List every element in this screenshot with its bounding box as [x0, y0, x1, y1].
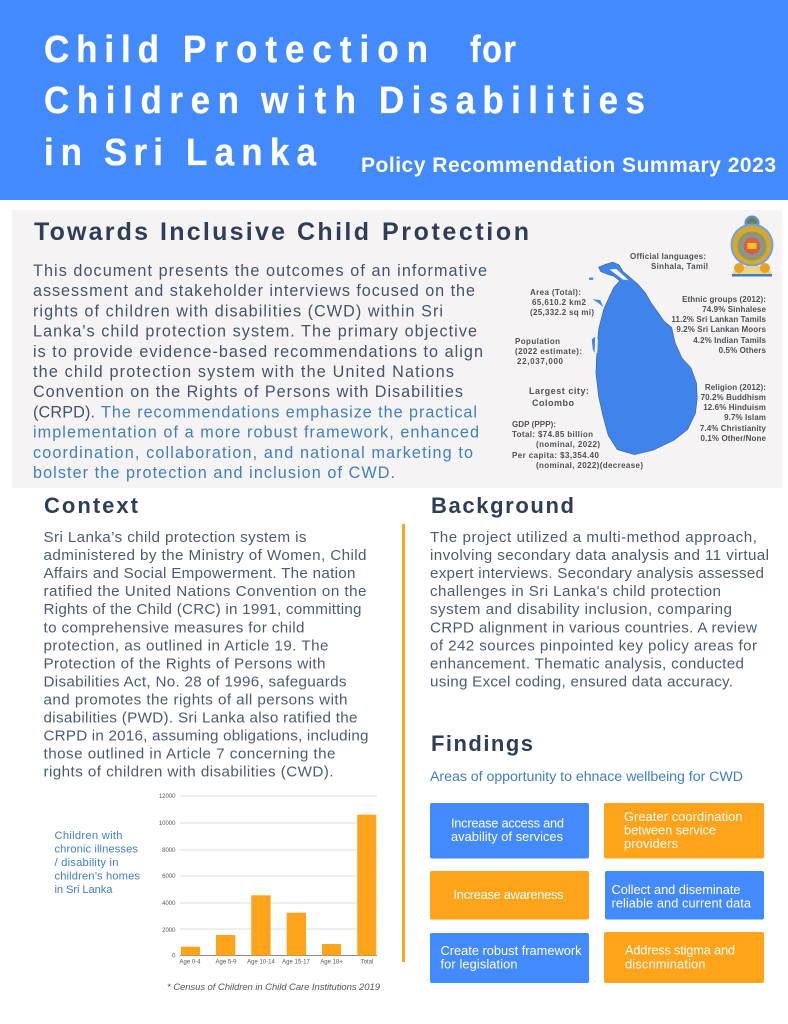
context text: Rights of the Child (CRC) in 1991, committing [44, 601, 362, 618]
GDP: GDP (PPP): [512, 420, 556, 429]
box: access to services [430, 803, 589, 858]
religion [700, 383, 766, 443]
background text: of 242 sources pinpointed key policy areas for [430, 637, 757, 654]
bar chart: Age 15-17 [282, 960, 310, 966]
GDP: (nominal, 2022)(decrease) [536, 461, 643, 470]
box: access to services: Increase access and [451, 816, 564, 830]
background text [430, 529, 769, 690]
GDP: (nominal, 2022) [536, 440, 600, 449]
background text: challenges in Sri Lanka's child protection [430, 583, 721, 600]
box: collect data: Collect and diseminate [612, 882, 740, 897]
icon: national emblem [730, 216, 774, 276]
bar chart [159, 794, 377, 966]
bar chart: 8000 [162, 848, 176, 854]
official languages: Official languages: [630, 252, 706, 261]
box: robust framework: Create robust framework [440, 943, 582, 958]
ethnic groups: 74.9% Sinhalese [702, 305, 766, 314]
panel: context [44, 493, 368, 781]
ethnic groups [671, 295, 766, 355]
box: stigma [604, 932, 764, 983]
divider [402, 524, 405, 962]
title: with [260, 79, 356, 121]
intro text: The recommendations emphasize the practical [101, 403, 477, 421]
ethnic groups: 11.2% Sri Lankan Tamils [671, 315, 766, 324]
box: robust framework: for legislation [440, 956, 518, 972]
title: Child [44, 28, 159, 70]
intro text: implementation of a more robust framework, enhanced [33, 424, 479, 442]
title: Protection [183, 28, 428, 70]
religion: 9.7% Islam [724, 413, 766, 422]
background text: enhancement. Thematic analysis, conducted [430, 655, 744, 672]
bar chart: 0 [172, 954, 176, 960]
official languages: Sinhala, Tamil [651, 262, 708, 271]
background text: expert interviews. Secondary analysis assessed [430, 565, 764, 582]
box: access to services: avability of services [451, 829, 563, 844]
panel: towards inclusive child protection [12, 210, 782, 488]
heading: context: Context [44, 493, 139, 518]
box: collect data: reliable and current data [612, 896, 752, 910]
heading: Child [297, 218, 369, 246]
map of Sri Lanka [589, 262, 697, 455]
title: in [44, 131, 82, 173]
GDP: Total: $74.85 billion [512, 430, 593, 439]
intro text: Convention on the Rights of Persons with Disabilities [33, 383, 463, 401]
population: 22,037,000 [517, 357, 564, 366]
largest city: Colombo [532, 398, 574, 408]
chart caption: in Sri Lanka [54, 884, 113, 896]
box: collect data [605, 871, 764, 920]
background text: system and disability inclusion, comparing [430, 601, 732, 618]
bar chart: 2000 [162, 928, 176, 934]
title: Sri [104, 131, 163, 173]
chart caption: chronic illnesses [54, 844, 138, 856]
context text: administered by the Ministry of Women, Child [44, 547, 366, 564]
context text: disabilities (PWD). Sri Lanka also ratified the [44, 710, 358, 726]
context text: Sri Lanka’s child protection system is [44, 529, 307, 546]
ethnic groups: 4.2% Indian Tamils [693, 336, 766, 345]
religion: 70.2% Buddhism [701, 393, 766, 402]
bar chart: 12000 [159, 794, 176, 800]
chart caption: children’s homes [54, 870, 140, 882]
intro text: (CRPD). [33, 403, 95, 421]
background text: CRPD alignment in various countries. A review [430, 619, 757, 636]
population [515, 337, 582, 366]
context text: ratified the United Nations Convention on the [44, 583, 366, 600]
context text: Disabilities Act, No. 28 of 1996, safeguards [44, 673, 347, 690]
ethnic groups: Ethnic groups (2012): [682, 295, 766, 304]
title [44, 28, 645, 173]
context text: and promotes the rights of all persons with [44, 692, 348, 708]
context text: CRPD in 2016, assuming obligations, including [44, 728, 368, 745]
bar chart: Age 0-4 [179, 960, 201, 966]
official languages [630, 252, 708, 271]
box: stigma: Address stigma and [625, 942, 735, 958]
context text: Protection of the Rights of Persons with [44, 655, 326, 672]
population: Population [515, 337, 560, 346]
bar chart: 10000 [159, 821, 176, 827]
box: greater coordination: providers [624, 836, 678, 851]
context text: protection, as outlined in Article 19. The [44, 637, 328, 654]
title: Disabilities [379, 79, 645, 121]
intro text: is to provide evidence-based recommendations to align [33, 343, 483, 361]
religion: 7.4% Christianity [700, 424, 766, 433]
intro text: assessment and stakeholder interviews focused on the [33, 282, 475, 300]
intro text [33, 262, 487, 482]
header banner [0, 0, 788, 200]
area: (25,332.2 sq mi) [530, 308, 594, 317]
chart source note: * Census of Children in Child Care Institutions 2019 [167, 982, 381, 993]
title: Children [44, 79, 239, 121]
population: (2022 estimate): [515, 347, 582, 356]
GDP [512, 420, 643, 470]
context text: Affairs and Social Empowerment. The nation [44, 565, 356, 582]
religion: 12.6% Hinduism [703, 403, 766, 412]
context text: to comprehensive measures for child [44, 619, 304, 636]
bar chart: Age 18+ [320, 960, 343, 966]
heading: findings: Findings [431, 731, 533, 756]
context text [44, 529, 368, 781]
subtitle: Policy Recommendation Summary 2023 [361, 154, 776, 177]
intro text: coordination, collaboration, and national marketing to [33, 444, 473, 462]
chart caption [54, 830, 140, 896]
chart caption: Children with [54, 830, 122, 842]
box: greater coordination [604, 803, 764, 858]
heading [34, 218, 529, 246]
bar chart: Age 10-14 [247, 960, 276, 966]
box: stigma: discrimination [625, 956, 706, 972]
heading: Towards [34, 218, 148, 246]
box: greater coordination: between service [624, 822, 716, 838]
intro text: Lanka's child protection system. The primary objective [33, 323, 477, 341]
heading: Inclusive [160, 218, 285, 246]
largest city: Largest city: [529, 386, 589, 396]
ethnic groups: 9.2% Sri Lankan Moors [676, 325, 766, 334]
bar chart: 6000 [162, 874, 176, 880]
context text: those outlined in Article 7 concerning the [44, 746, 336, 763]
intro text: This document presents the outcomes of an informative [33, 262, 487, 280]
chart caption: / disability in [54, 857, 118, 869]
bar chart: 4000 [162, 901, 176, 907]
bar chart: Total [361, 960, 373, 966]
box: increase awareness [430, 871, 589, 920]
GDP: Per capita: $3,354.40 [512, 451, 600, 460]
panel: background [430, 493, 769, 690]
intro text: the child protection system with the United Nations [33, 363, 454, 381]
intro text: bolster the protection and inclusion of CWD. [33, 464, 395, 482]
context text: rights of children with disabilities (CWD). [44, 764, 334, 781]
title: for [470, 29, 516, 71]
area: Area (Total): [530, 288, 581, 297]
heading: background: Background [431, 493, 574, 518]
title: Lanka [186, 131, 317, 173]
box: greater coordination: Greater coordination [624, 809, 742, 824]
area: 65,610.2 km2 [532, 298, 587, 307]
area [530, 288, 594, 317]
bar chart: Age 5-9 [215, 960, 237, 966]
ethnic groups: 0.5% Others [719, 346, 766, 355]
background text: using Excel coding, ensured data accuracy. [430, 673, 733, 690]
intro text: rights of children with disabilities (CWD) within Sri [33, 302, 443, 320]
panel: findings [430, 731, 764, 983]
box: increase awareness: Increase awareness [454, 887, 564, 902]
background text: involving secondary data analysis and 11 virtual [430, 547, 769, 564]
findings subheading: Areas of opportunity to ehnace wellbeing for CWD [430, 769, 743, 785]
religion: 0.1% Other/None [700, 434, 766, 443]
heading: Protection [382, 218, 529, 246]
largest city [529, 386, 589, 408]
map labels [512, 252, 766, 470]
religion: Religion (2012): [705, 383, 766, 392]
box: robust framework [430, 933, 589, 983]
background text: The project utilized a multi-method approach, [430, 529, 757, 546]
